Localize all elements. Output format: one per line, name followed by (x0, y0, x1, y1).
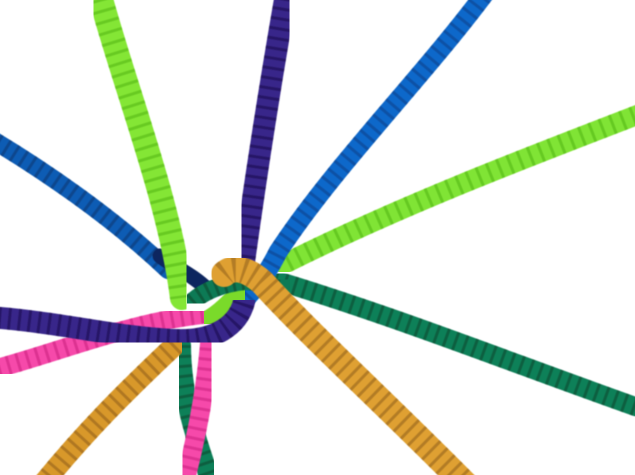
rope: blue right strand (240, 0, 489, 304)
rope: pink lower strand (184, 338, 210, 475)
rope: dark green knot loop (192, 281, 285, 302)
rope: gold lower strand (42, 345, 175, 475)
rope: purple top strand (244, 0, 287, 262)
rope: dark green lower strand (181, 345, 212, 475)
rope: light green knot segment (206, 290, 243, 322)
rope: light green top strand (98, 0, 182, 298)
rope: pink left strand (0, 314, 206, 371)
rope: dark green right strand (275, 280, 635, 410)
rope: gold right strand over knot (224, 269, 468, 475)
rope: purple horizontal strand (0, 302, 244, 340)
rope: light green right strand (284, 112, 635, 264)
rope: dark blue left strand (0, 137, 208, 290)
